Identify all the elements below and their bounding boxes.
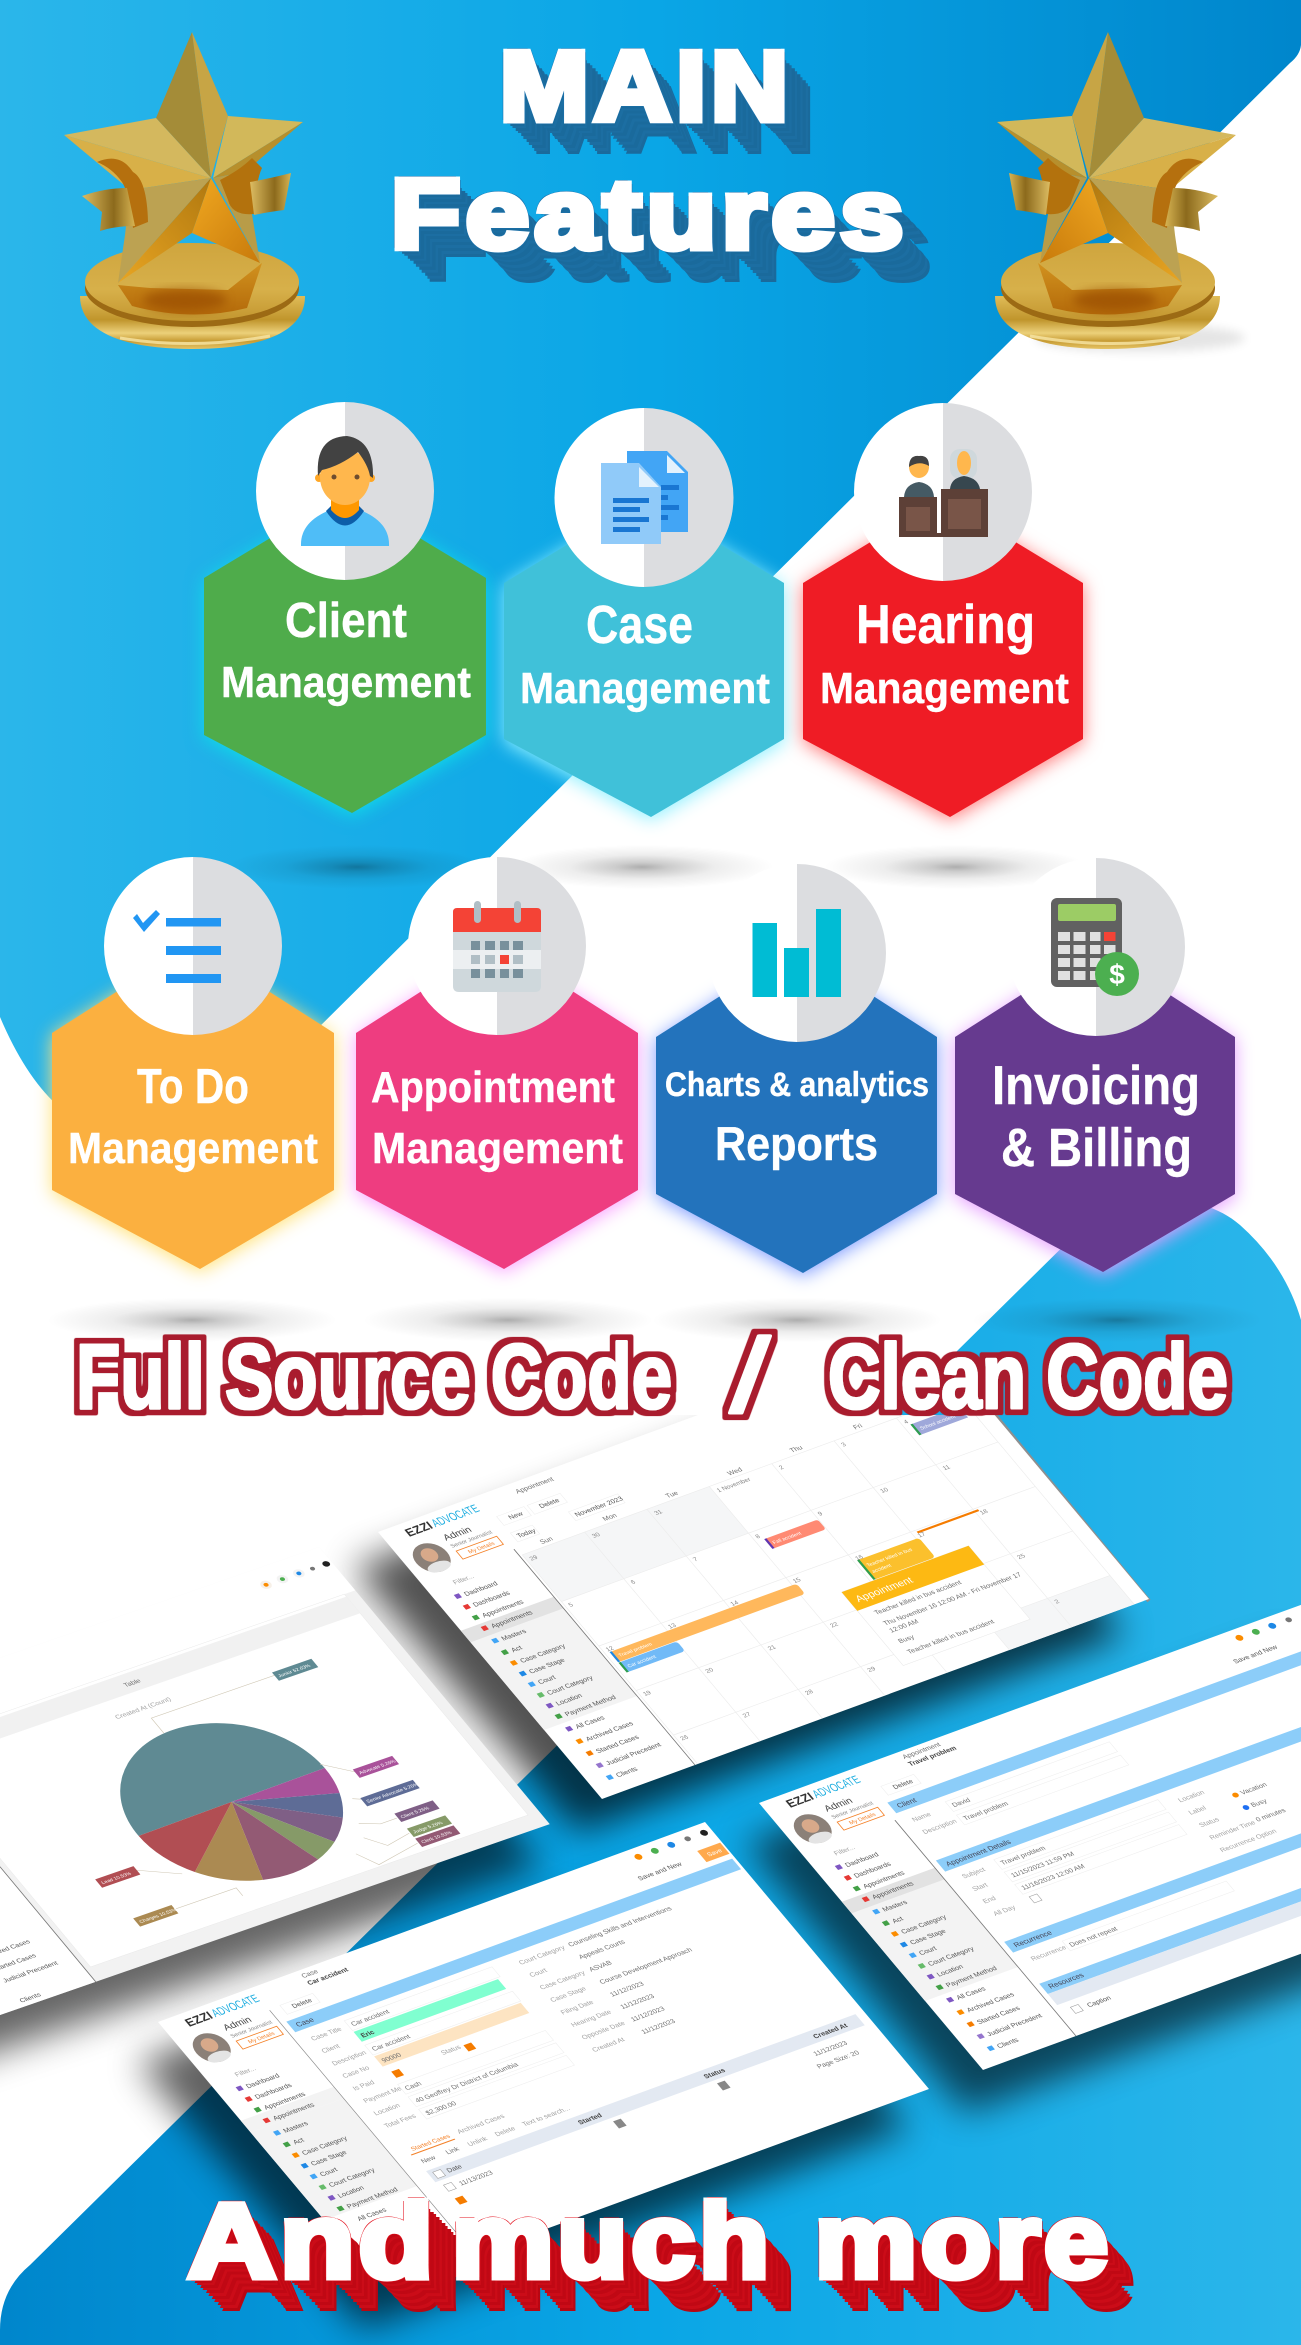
case form fields: Hearing Date — [570, 2009, 613, 2029]
calendar events: School accident — [919, 1414, 958, 1431]
appointment form sidebar: ADVOCATE — [809, 1773, 863, 1801]
icon: case documents — [554, 408, 733, 587]
appointment popup: 12:00 AM — [888, 1619, 921, 1634]
form fields: 11/15/2023 11:59 PM — [1010, 1851, 1076, 1879]
calendar month grid: 8 — [754, 1533, 762, 1540]
lower blue background shape — [0, 1199, 1301, 2345]
panel: to do management — [52, 857, 334, 1269]
appointment form sidebar: Case Stage — [909, 1928, 948, 1946]
case form fields: Filing Date — [560, 1999, 596, 2016]
case form sidebar: Payment Method — [346, 2187, 400, 2210]
form fields — [909, 1708, 1301, 2014]
case form sidebar: Dashboard — [245, 2073, 282, 2090]
label: case management: Case — [586, 595, 693, 655]
appointment form sidebar: Archived Cases — [966, 1992, 1017, 2014]
calendar sidebar: Filter... — [452, 1574, 476, 1586]
calendar toolbar: Mon — [602, 1513, 619, 1523]
calendar sidebar: Masters — [500, 1628, 529, 1642]
appointment form header — [866, 1614, 1301, 1795]
title: MAIN: MAIN — [500, 31, 793, 141]
screenshot: pie chart: Table — [123, 1678, 143, 1689]
case form sidebar: EZZI — [182, 2009, 216, 2029]
form fields: Travel problem — [999, 1845, 1048, 1867]
calendar month grid: 24 — [954, 1576, 965, 1584]
case form fields: Location — [373, 2103, 402, 2117]
calendar month grid: 7 — [692, 1556, 700, 1563]
icon: bar chart — [708, 864, 886, 1042]
panel: case management — [504, 408, 784, 817]
appointment form sidebar: Court Category — [927, 1946, 976, 1968]
case form fields: Description — [331, 2050, 368, 2067]
case table: Link — [445, 2146, 462, 2156]
panel: appointment management — [356, 857, 638, 1269]
case form fields: 11/12/2023 — [640, 2018, 677, 2036]
appointment popup: Appointment — [854, 1576, 916, 1605]
calendar events: Travel problem — [617, 1642, 654, 1658]
calendar sidebar: Act — [510, 1645, 524, 1654]
pie tag labels: Advocate 5.26% — [358, 1759, 398, 1776]
case form sidebar: Senior Journalist — [230, 2020, 274, 2039]
appointment form sidebar: Filter... — [833, 1845, 857, 1857]
calendar events: Teacher killed in bus — [866, 1547, 914, 1568]
calendar sidebar: ADVOCATE — [428, 1502, 482, 1530]
form fields: Does not repeat — [1068, 1926, 1119, 1949]
icon: calculator with dollar — [1007, 858, 1185, 1036]
calendar month grid: 17 — [916, 1531, 928, 1539]
calendar month grid: 29 — [866, 1666, 878, 1674]
calendar toolbar: Wed — [726, 1467, 744, 1477]
label: hearing management: Hearing — [856, 593, 1035, 655]
form fields: Recurrence — [1030, 1945, 1068, 1963]
calendar sidebar: Admin — [441, 1525, 474, 1543]
form fields: All Day — [992, 1904, 1018, 1918]
appointment form sidebar: Appointments — [871, 1881, 916, 1901]
case form sidebar: Act — [292, 2137, 306, 2146]
case form header — [265, 1826, 729, 2015]
calendar month grid: 3 — [840, 1442, 848, 1448]
case table: Delete — [494, 2126, 517, 2138]
calendar month grid: 1 November — [715, 1476, 753, 1494]
calendar sidebar: Appointments — [481, 1599, 526, 1619]
label: client management: Management — [221, 658, 471, 707]
calendar month grid: 2 — [1053, 1599, 1062, 1605]
pie tag labels: Charges 10.53% — [138, 1907, 179, 1925]
appointment form sidebar: My Details — [848, 1812, 878, 1826]
calendar month grid: 13 — [667, 1622, 678, 1630]
label: hearing management — [820, 593, 1069, 713]
panel: client management — [204, 402, 486, 813]
calendar sidebar: Dashboards — [472, 1590, 512, 1608]
calendar events — [610, 1415, 980, 1672]
shadow: form screenshot right — [745, 1643, 1301, 2113]
calendar sidebar: EZZI — [402, 1519, 436, 1539]
pie sidebar items: Judicial Precedent — [2, 1960, 60, 1984]
label: case management: Management — [520, 664, 770, 713]
heading: full source code: / — [730, 1318, 771, 1435]
calendar toolbar: Sun — [539, 1536, 555, 1546]
case form fields: Opposite Date — [581, 2020, 627, 2041]
calendar sidebar: Senior Journalist — [450, 1530, 494, 1549]
calendar sidebar: Payment Method — [564, 1694, 618, 1718]
case form header: Car accident — [306, 1967, 351, 1987]
case form fields: 11/12/2023 — [609, 1981, 646, 1998]
calendar month grid: 30 — [929, 1643, 940, 1651]
case form sidebar: Location — [337, 2185, 366, 2199]
heading: and much more — [185, 2183, 1134, 2312]
case form fields: Client — [320, 2043, 342, 2055]
calendar month grid: 16 — [854, 1554, 865, 1562]
case form fields: Appeals Courts — [578, 1939, 627, 1961]
label: case management — [520, 595, 770, 713]
calendar toolbar: Delete — [538, 1498, 562, 1510]
heading: and much more: more — [815, 2183, 1112, 2300]
calendar month grid: 31 — [653, 1509, 665, 1517]
heading: full source code: Full Source Code — [76, 1326, 672, 1428]
shadow ellipses row one — [225, 845, 1088, 889]
calendar sidebar: Started Cases — [595, 1734, 641, 1755]
calendar month grid: 20 — [704, 1667, 716, 1675]
calendar month grid: 22 — [829, 1621, 840, 1629]
calendar sidebar: All Cases — [574, 1715, 607, 1730]
case form fields — [311, 1907, 692, 2128]
heading: full source code — [76, 1318, 1228, 1435]
calendar month grid — [522, 1395, 1134, 1764]
case form sidebar: Appointments — [263, 2091, 308, 2111]
calendar toolbar — [496, 1423, 862, 1544]
pie tag labels: Senior Advocate 5.26% — [365, 1782, 421, 1804]
calendar sidebar: Archived Cases — [585, 1721, 636, 1743]
case form fields: Course Development Approach — [598, 1947, 694, 1986]
case form sidebar: Court — [319, 2167, 339, 2178]
calendar sidebar: Case Stage — [528, 1657, 567, 1675]
case table: Created At — [812, 2023, 850, 2040]
form fields: Name — [911, 1812, 933, 1823]
appointment form sidebar: Act — [891, 1916, 905, 1925]
form fields: Busy — [1250, 1798, 1269, 1809]
appointment form sidebar: Masters — [881, 1899, 910, 1913]
calendar sidebar: Court — [537, 1675, 558, 1686]
case form fields: 11/12/2023 — [619, 1993, 656, 2011]
calendar month grid: 11 — [941, 1464, 952, 1472]
calendar sidebar: Case Category — [519, 1643, 568, 1665]
case form fields: Car accident — [350, 2009, 391, 2028]
case form sidebar: Filter... — [234, 2066, 258, 2078]
label: charts and reports: Charts & analytics — [665, 1066, 929, 1104]
appointment form sidebar: Clients — [996, 2037, 1021, 2050]
case table: Page Size: 20 — [816, 2050, 861, 2070]
case form sidebar: Case Category — [301, 2135, 350, 2157]
calendar sidebar — [404, 1504, 696, 1780]
appointment form sidebar: Dashboard — [844, 1852, 881, 1869]
label: appointment management: Management — [372, 1124, 623, 1173]
calendar month grid: 30 — [591, 1532, 602, 1540]
calendar sidebar: Location — [555, 1693, 584, 1707]
appointment form sidebar: Admin — [822, 1796, 855, 1814]
appointment popup: Teacher killed in bus accident — [873, 1580, 963, 1616]
form fields: Description — [921, 1818, 959, 1836]
appointment popup — [842, 1546, 1030, 1666]
calendar month grid: 29 — [528, 1554, 540, 1562]
case form fields: Case No — [341, 2065, 371, 2080]
calendar toolbar: Tue — [664, 1490, 680, 1500]
screenshot: calendar — [378, 1415, 1150, 1799]
icon: right gold star trophy — [995, 32, 1245, 352]
appointment popup: Thu November 16 12:00 AM - Fri November 17 — [882, 1572, 1023, 1627]
appointment form sidebar: Court — [918, 1946, 939, 1957]
case table: Unlink — [466, 2136, 490, 2148]
label: appointment management — [371, 1063, 623, 1173]
appointment popup: Teacher killed in bus accident — [906, 1619, 996, 1656]
title: Features: Features — [391, 159, 909, 269]
appointment form sidebar: Case Category — [900, 1914, 949, 1936]
case form sidebar: ADVOCATE — [208, 1992, 262, 2020]
case form sidebar: My Details — [247, 2031, 277, 2045]
calendar events: accident — [871, 1563, 893, 1575]
case form header: Delete — [291, 1998, 314, 2010]
calendar events: Car accident — [626, 1654, 658, 1669]
form section bands: Recurrence — [1011, 1929, 1054, 1949]
appointment form header: Travel problem — [907, 1745, 958, 1768]
calendar toolbar: Appointment — [514, 1476, 556, 1495]
appointment form header: Appointment — [901, 1742, 943, 1761]
label: charts and reports: Reports — [715, 1117, 878, 1170]
calendar toolbar: Thu — [789, 1445, 805, 1454]
calendar sidebar: Judicial Precedent — [605, 1742, 663, 1767]
case form header: Save and New — [637, 1861, 685, 1882]
form fields: Recurrence Option — [1219, 1828, 1278, 1854]
pie chart — [78, 1698, 385, 1906]
appointment form header: Delete — [892, 1779, 915, 1791]
case form sidebar: All Cases — [356, 2207, 389, 2223]
case form fields: Car accident — [371, 2034, 412, 2053]
panel: invoicing and billing — [955, 858, 1235, 1272]
appointment form sidebar: Started Cases — [976, 2005, 1022, 2026]
case form fields: Case Title — [310, 2026, 344, 2042]
shadow: case form screenshot — [138, 1861, 909, 2329]
calendar sidebar: Dashboard — [463, 1581, 500, 1598]
pie tag labels: Client 5.26% — [399, 1806, 432, 1820]
calendar month grid: 9 — [817, 1511, 825, 1517]
calendar toolbar: New — [507, 1511, 526, 1521]
appointment form sidebar: Judicial Precedent — [986, 2013, 1044, 2038]
calendar sidebar: My Details — [467, 1541, 497, 1555]
case form fields: 40 Geoffrey Dr District of Columbia — [414, 2062, 520, 2104]
form fields: Start — [971, 1882, 990, 1893]
form fields: Subject — [961, 1867, 987, 1880]
form fields: Reminder Time — [1208, 1820, 1257, 1841]
heading: and much more: much — [452, 2183, 773, 2300]
calendar month grid: 14 — [729, 1600, 741, 1607]
case form sidebar: Admin — [221, 2015, 254, 2033]
icon: hearing courtroom — [854, 403, 1032, 581]
form fields: End — [982, 1895, 998, 1905]
calendar toolbar: Fri — [852, 1423, 865, 1431]
label: invoicing and billing: & Billing — [1001, 1118, 1192, 1178]
calendar sidebar: Appointments — [490, 1610, 535, 1630]
calendar month grid: 26 — [679, 1734, 691, 1742]
calendar month grid: 19 — [642, 1690, 653, 1698]
case table: Started — [577, 2113, 604, 2126]
form section bands — [887, 1639, 1301, 2005]
case form sidebar: Court Category — [328, 2167, 377, 2189]
case form fields: Eric — [360, 2029, 377, 2039]
form fields: Location — [1177, 1790, 1206, 1804]
shadow ellipses row two — [47, 1298, 1262, 1342]
label: invoicing and billing — [992, 1054, 1200, 1178]
pie connector lines — [42, 1674, 423, 1931]
calendar month grid: 5 — [567, 1602, 575, 1609]
calendar toolbar: November 2023 — [574, 1496, 625, 1518]
icon: calculator with dollar: $ — [1109, 959, 1125, 990]
pie sidebar items: Clients — [18, 1992, 43, 2004]
label: invoicing and billing: Invoicing — [992, 1054, 1200, 1116]
icon: client person — [256, 402, 434, 580]
panel: hearing management — [803, 403, 1083, 817]
case form fields: Court — [528, 1968, 549, 1979]
form fields: Travel problem — [962, 1801, 1010, 1822]
calendar month grid: 28 — [804, 1689, 815, 1696]
shadow: pie screenshot — [0, 1612, 543, 2070]
calendar month grid: 18 — [979, 1508, 990, 1516]
calendar sidebar: Clients — [615, 1766, 640, 1779]
label: to do management: To Do — [137, 1060, 249, 1114]
screenshot: pie chart: Created At (Count) — [114, 1697, 173, 1721]
appointment form sidebar: All Cases — [955, 1986, 988, 2001]
case table: New — [420, 2154, 438, 2165]
upper blue background shape — [0, 0, 1301, 1135]
top bar icons — [258, 1559, 333, 1590]
case table: Status — [703, 2067, 727, 2080]
label: to do management — [68, 1060, 318, 1173]
case form header: Case — [300, 1969, 320, 1980]
form section bands: Client — [895, 1796, 919, 1810]
case form fields: Court Category — [518, 1945, 567, 1966]
label: to do management: Management — [68, 1124, 318, 1173]
case form fields: 90000 — [381, 2052, 403, 2064]
calendar toolbar: Sat — [913, 1400, 928, 1409]
case band — [286, 1859, 741, 2032]
calendar month grid: 25 — [1016, 1553, 1028, 1561]
case table: Date — [446, 2164, 464, 2174]
pie tag labels: Clerk 10.53% — [420, 1830, 454, 1845]
icon: left gold star trophy — [64, 32, 305, 349]
label: hearing management: Management — [820, 664, 1069, 713]
form fields: Vacation — [1239, 1782, 1269, 1796]
form fields: Status — [1198, 1817, 1222, 1829]
icon: to do checklist — [104, 857, 282, 1035]
calendar month grid: 23 — [891, 1598, 903, 1606]
form fields: Caption — [1086, 1995, 1113, 2009]
pie tag labels: Lead 10.53% — [100, 1871, 133, 1886]
case table — [410, 2014, 864, 2205]
calendar month grid: 21 — [766, 1644, 778, 1652]
case form fields: 11/12/2023 — [630, 2006, 667, 2023]
form fields: 11/16/2023 12:00 AM — [1020, 1864, 1087, 1892]
form fields: Label — [1188, 1805, 1208, 1816]
pie tag labels: Judge 5.26% — [412, 1820, 445, 1835]
icon: appointment calendar — [408, 857, 586, 1035]
case table: Text to search... — [521, 2106, 572, 2128]
appointment form sidebar: Appointments — [862, 1870, 907, 1890]
case form fields: Payment Method — [362, 2081, 416, 2105]
calendar month grid: 27 — [741, 1711, 753, 1719]
form section bands: Appointment Details — [944, 1838, 1013, 1868]
case table: Started Cases — [410, 2133, 452, 2153]
case form sidebar: Masters — [282, 2120, 310, 2135]
calendar month grid: 15 — [792, 1577, 803, 1585]
appointment form sidebar: EZZI — [783, 1790, 817, 1810]
case form sidebar: Appointments — [272, 2102, 317, 2122]
case table: 11/13/2023 — [458, 2170, 495, 2187]
appointment form sidebar: Senior Journalist — [831, 1801, 875, 1820]
case table: 11/12/2023 — [812, 2040, 849, 2058]
pie tag labels: Junior 52.63% — [277, 1663, 313, 1679]
appointment popup: Busy — [897, 1634, 917, 1645]
form fields: 0 minutes — [1255, 1807, 1288, 1823]
calendar sidebar: Court Category — [546, 1675, 595, 1697]
shadow: calendar screenshot — [353, 1369, 1124, 1833]
calendar toolbar: Today — [516, 1528, 538, 1540]
calendar events: Fall accident — [772, 1531, 804, 1546]
form section bands: Resources — [1046, 1971, 1086, 1990]
screenshot: case form — [158, 1822, 929, 2289]
label: charts and reports — [665, 1066, 929, 1170]
case form header: Save — [706, 1848, 724, 1858]
case form sidebar — [184, 1994, 456, 2232]
case form fields: Case Stage — [549, 1986, 588, 2004]
label: client management: Client — [285, 594, 407, 648]
pie sidebar items — [0, 1936, 76, 2004]
panel: charts and analytics reports — [656, 864, 937, 1273]
case form sidebar: Dashboards — [254, 2082, 294, 2101]
calendar month grid: 1 — [991, 1621, 999, 1628]
appointment form sidebar — [762, 1772, 1076, 2070]
case form fields: Case Category — [539, 1970, 587, 1991]
case form fields: $2,300.00 — [425, 2101, 458, 2117]
form fields: David — [951, 1797, 972, 1809]
case form fields: Total Fees — [383, 2113, 418, 2130]
case form fields: Cash — [404, 2081, 424, 2092]
calendar month grid: 4 — [902, 1419, 911, 1426]
case table: Archived Cases — [456, 2113, 507, 2136]
case form fields: Counseling Skills and Interventions — [567, 1906, 674, 1948]
appointment form header: Save and New — [1232, 1644, 1280, 1665]
calendar month grid: 12 — [604, 1645, 616, 1653]
case form fields: ASVAB — [588, 1960, 614, 1973]
case form fields: Is Paid — [352, 2079, 376, 2092]
calendar month grid: 2 — [778, 1464, 786, 1471]
label: client management — [221, 594, 471, 707]
case form fields: Status — [440, 2044, 463, 2057]
case band: Case — [294, 2016, 316, 2029]
calendar month grid: 6 — [629, 1579, 638, 1586]
case form sidebar: Case Stage — [310, 2150, 349, 2167]
case form fields: Created At — [591, 2037, 627, 2054]
pie tag labels — [1, 1658, 460, 1942]
appointment form sidebar: Payment Method — [945, 1965, 999, 1989]
heading: and much more: And — [188, 2183, 438, 2300]
appointment form sidebar: Dashboards — [853, 1861, 893, 1879]
screenshot: appointment form — [759, 1603, 1301, 2070]
screenshot: pie chart — [0, 1547, 550, 2026]
label: appointment management: Appointment — [371, 1063, 615, 1112]
calendar month grid: 10 — [879, 1487, 891, 1495]
appointment form sidebar: Location — [936, 1964, 965, 1978]
